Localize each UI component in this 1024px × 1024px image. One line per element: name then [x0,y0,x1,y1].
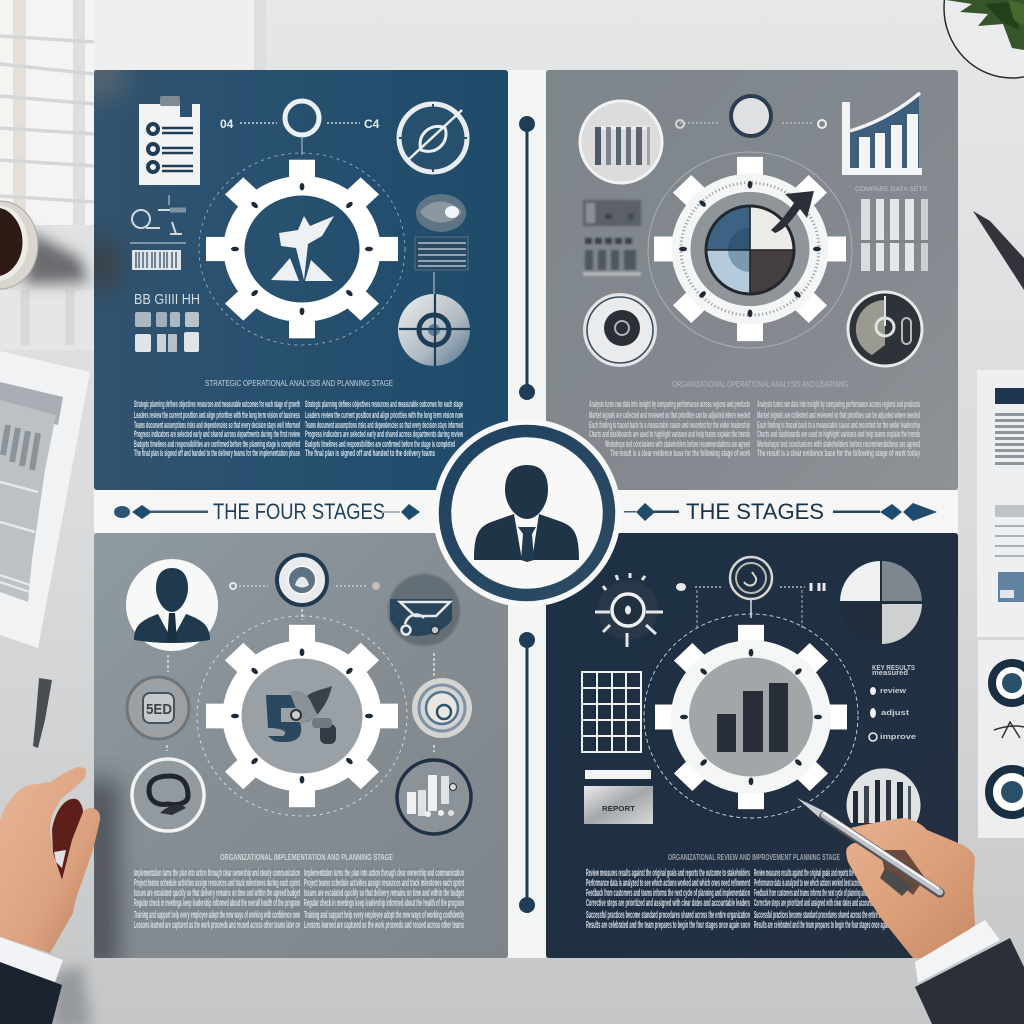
body text [589,399,920,459]
body text: Budgets timelines and responsibilities are confirmed before the planning stage is completed [134,439,300,450]
body text: Implementation turns the plan into action through clear ownership and steady communication [134,868,300,879]
body text: Strategic planning defines objectives resources and measurable outcomes for each stage of growth [134,399,300,410]
panel: stage one, navy [60,49,508,490]
icon: fist glyph medallion [127,677,189,739]
icon: fist glyph medallion: 5ED [146,701,172,718]
gear: analysis [654,157,846,341]
icon: grey data blocks [583,200,641,276]
panel: stage one, navy: Leaders review the current position and align priorities with the long term vision now [305,410,463,421]
icon: legend notes: KEY RESULTS [872,665,915,672]
body text: Analysis turns raw data into insight by comparing performance across regions and products [589,399,750,410]
icon: top ring with connectors: 04 [220,117,234,131]
icon: top ring with connectors: C4 [364,117,380,131]
icon: document stack [584,770,653,824]
small caption: COMPARE DATA SETS [855,187,927,193]
dashed orbit [644,614,858,818]
icon: target with leaf [399,104,467,172]
body text: Each finding is traced back to a measurable cause and recorded for the wider leadership [589,420,750,431]
orbit [648,152,852,348]
icon: bars in circle [580,101,662,183]
body text: Corrective steps are prioritized and assigned with clear dates and accountable leaders [586,898,750,909]
window reflection [0,0,266,350]
subheading: ORGANIZATIONAL OPERATIONAL ANALYSIS AND LEARNING [672,380,848,389]
pen [797,798,940,893]
body text [586,868,899,931]
icon: pie chart [840,561,922,644]
shadow under left hand [50,965,92,1024]
icon: symbol tiles [134,291,200,352]
icon: legend notes: measured [872,670,908,677]
pen on desk, right [973,211,1024,290]
panel: stage three, grey blue: Issues are escalated quickly so that delivery remains on time and within the budget [304,888,464,899]
icon: businessman [474,465,579,562]
icon: person medallion [126,559,218,651]
panel: stage three, grey blue: Project teams schedule activities assign resources and track milestones each sprint [304,878,464,889]
body text: Feedback from customers and teams informs the next cycle of planning and implementation [586,888,750,899]
panel: stage three, grey blue: Training and support help every employee adopt the new ways of working confidently [304,910,464,921]
white cross divider [94,70,958,958]
body text: Issues are escalated quickly so that delivery remains on time and within the agreed budget [134,888,300,899]
body text: Lessons learned are captured as the work proceeds and reused across other teams later on [134,920,300,931]
panel: stage one, navy: Strategic planning defines objectives resources and measurable outcomes for each stage [305,399,463,410]
body text: Market signals are collected and reviewed so that priorities can be adjusted where needed [589,410,750,421]
body text [134,868,464,931]
printed sheet with rings, right [978,640,1024,838]
icon: dark route badge [388,574,460,646]
banner right: the stages [624,499,937,524]
panel: stage four, dark [546,533,958,958]
subheading: ORGANIZATIONAL IMPLEMENTATION AND PLANNING STAGE [220,853,393,862]
subheading: STRATEGIC OPERATIONAL ANALYSIS AND PLANNING STAGE [205,379,393,388]
icon: bar chart in gear [717,683,788,752]
icon: spiral medallion [676,557,824,630]
body text: Charts and dashboards are used to highlight variance and help teams explain the trends [589,429,750,440]
text: Teams document assumptions risks and dependencies so that every decision stays informed [305,420,463,431]
panel: stage three, grey blue: Lessons learned are captured as the work proceeds and reused across other teams [304,920,464,931]
icon: top medallion [676,96,826,136]
body text: Leaders review the current position and align priorities with the long term vision of business [134,410,300,421]
icon: legend notes: review [880,688,907,695]
body text: Progress indicators are selected early and shared across departments during the first review [134,429,300,440]
printed report, right [977,370,1024,637]
icon: bar circle [846,768,920,823]
printed report, left [0,351,90,648]
icon: tool glyph in gear [266,686,336,744]
body text: The final plan is signed off and handed to the delivery teams [305,448,435,459]
body text: Review measures results against the original goals and reports the outcome to stakeholders [586,868,750,879]
icon: symbol tiles: BB GIIII HH [134,291,200,308]
icon: legend notes: adjust [881,710,910,717]
icon: headset medallion [584,294,656,366]
body text: Teams document assumptions risks and dependencies so that every decision stays well informed [134,420,300,431]
icon: swirl glyphs left [130,195,186,243]
body text: Performance data is analyzed to see which actions worked and which ones need refinement [586,878,750,889]
plant in pot [944,0,1024,78]
body text: The result is a clear evidence base for the following stage of work [610,448,750,459]
vertical timeline, top [519,116,535,400]
body text: Regular check in meetings keep leadership informed about the overall health of the program [134,898,300,909]
gear: execution [206,625,398,807]
icon: notes block [415,237,468,294]
body text: Project teams schedule activities assign resources and track milestones during each sprint [134,878,300,889]
banner left: the four stages [114,499,420,524]
small pen on desk [33,678,52,748]
panel: stage three, grey blue [84,533,508,970]
icon: top eye medallion [230,555,380,605]
icon: top ring with connectors [220,101,380,155]
body text: Training and support help every employee adopt the new ways of working with confidence now [134,910,300,921]
dashed orbit [197,616,407,816]
banner left: the four stages: THE FOUR STAGES [213,499,385,524]
gear: review [655,625,847,809]
icon: jet in gear [271,216,334,281]
body text [134,399,463,459]
icon: barcode [132,250,181,270]
banner right: the stages: THE STAGES [686,499,824,524]
icon: monitor medallion [132,759,204,831]
panel: stage three, grey blue: Regular check in meetings keep leadership informed about the health of the program [304,898,464,909]
left hand with cuff [0,767,100,1024]
panel: stage two, grey [546,70,958,490]
icon: clipboard checklist [139,96,200,185]
icon: quadrant pie with arrow [706,191,814,294]
dashed orbit [199,153,405,345]
coffee cup [0,201,88,289]
connectors [167,609,434,752]
panel: stage one, navy: Budgets timelines and responsibilities are confirmed before the stage is completed [305,439,455,450]
icon: bars medallion [397,760,471,834]
body text: Workshops test conclusions with stakeholders before recommendations are agreed [605,439,750,450]
icon: growth bar chart [842,93,922,175]
icon: dark valve medallion [848,292,922,366]
gear: planning [206,160,398,338]
icon: idea sun [595,573,663,647]
vertical timeline, bottom [519,632,535,913]
panel: stage one, navy: Progress indicators are selected early and shared across departments during review [305,429,463,440]
icon: grid table [582,672,641,752]
icon: column stripes [860,199,928,271]
subheading: ORGANIZATIONAL REVIEW AND IMPROVEMENT PLANNING STAGE [668,853,840,862]
icon: document stack: REPORT [602,806,636,813]
icon: crosshair sphere [398,294,470,366]
body text: The final plan is signed off and handed to the delivery teams for the implementation phase [134,448,300,459]
right hand with pen [797,798,1024,1024]
icon: dial [416,194,466,232]
central person medallion [433,419,621,607]
icon: legend notes: improve [880,734,916,741]
body text: Results are celebrated and the team prepares to begin the four stages once again soon [586,920,750,931]
text: Implementation turns the plan into action through clear ownership and communication [304,868,464,879]
icon: legend notes [869,665,916,741]
icon: swirl medallion [412,678,472,738]
body text: Successful practices become standard procedures shared across the entire organization [586,910,750,921]
